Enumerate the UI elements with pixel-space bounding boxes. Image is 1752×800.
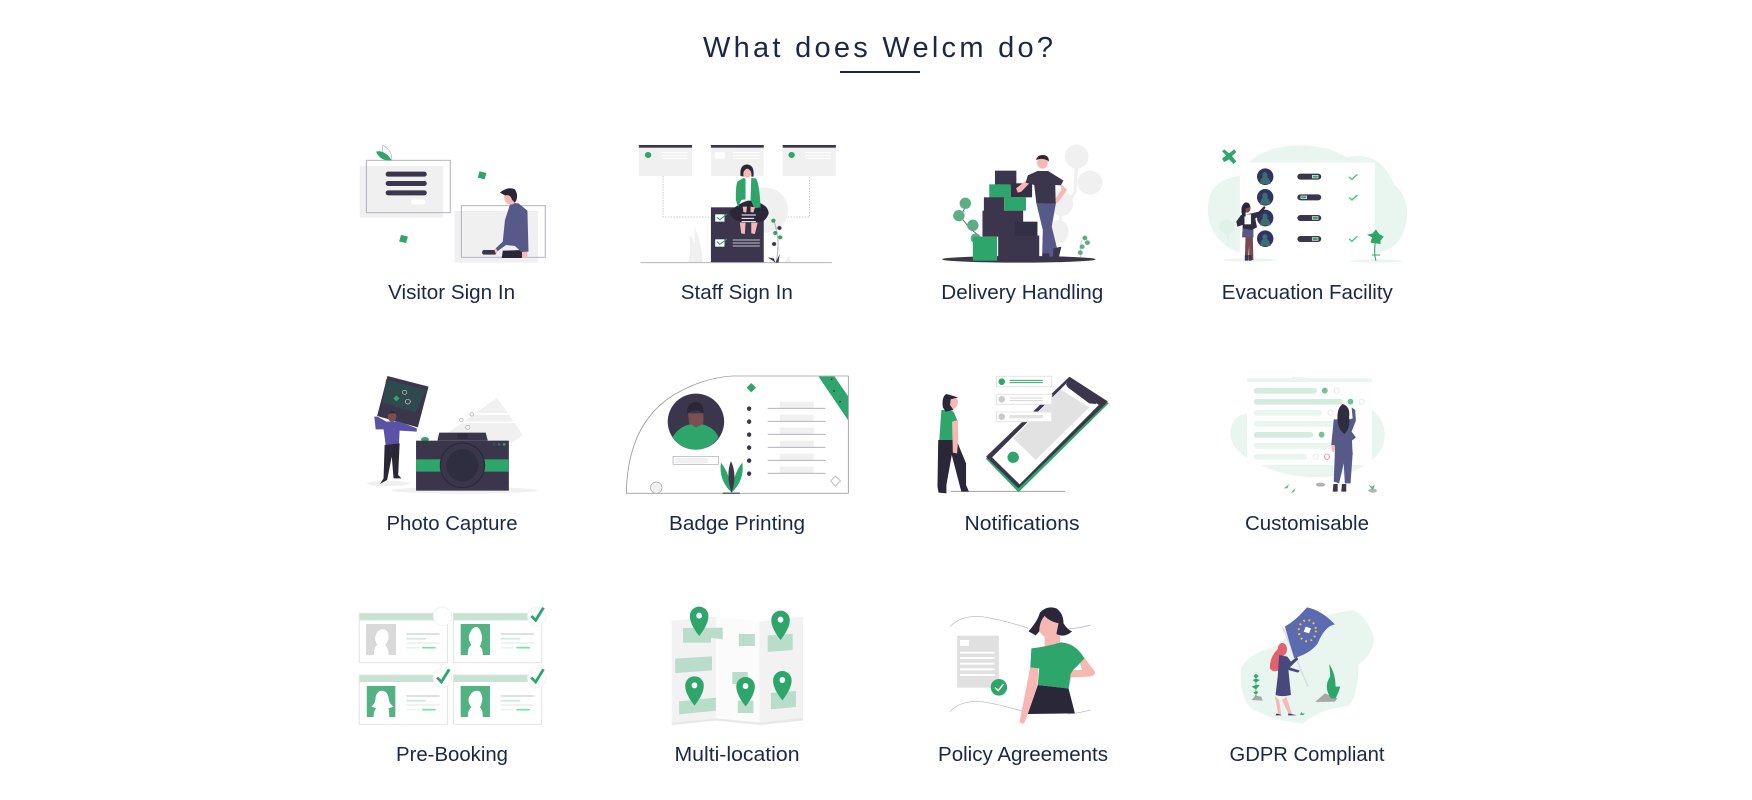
- panel: gdpr compliant: [1230, 607, 1385, 766]
- illustration: woman at settings list: [1230, 377, 1385, 493]
- panel: evacuation facility: [1208, 145, 1407, 304]
- panel: photo capture: [367, 376, 537, 535]
- illustration: folded map with pins: [672, 607, 803, 725]
- panel: multi-location: [672, 607, 803, 766]
- illustration: woman with EU flag: [1241, 607, 1374, 723]
- label: Delivery Handling: [941, 282, 1103, 304]
- label: Customisable: [1245, 513, 1369, 535]
- illustration: woman and phone: [937, 376, 1108, 493]
- label: Visitor Sign In: [388, 282, 515, 304]
- label: Staff Sign In: [681, 282, 793, 304]
- illustration: visitor badge: [626, 376, 848, 494]
- title: What does Welcm do?: [703, 32, 1053, 64]
- panel: policy agreements: [938, 607, 1108, 766]
- illustration: visitor pass cards: [359, 607, 546, 724]
- panel: badge printing: [626, 376, 848, 535]
- label: Badge Printing: [669, 513, 805, 535]
- illustration: man with stacked parcels: [942, 145, 1102, 263]
- label: Photo Capture: [386, 513, 518, 535]
- illustration: roll call checklist: [1208, 145, 1407, 263]
- label: Evacuation Facility: [1222, 282, 1393, 304]
- illustration: woman with policy document: [950, 607, 1095, 724]
- panel: delivery handling: [941, 145, 1103, 304]
- panel: pre-booking: [359, 607, 546, 766]
- illustration: visitor at sign-in screens: [360, 145, 545, 263]
- panel: customisable: [1230, 377, 1385, 535]
- label: Notifications: [964, 513, 1080, 535]
- title underline: [840, 71, 920, 73]
- label: Policy Agreements: [938, 744, 1108, 766]
- label: GDPR Compliant: [1230, 744, 1385, 766]
- panel: notifications: [937, 376, 1108, 535]
- illustration: staff on a checklist box: [639, 145, 836, 263]
- label: Pre-Booking: [396, 744, 508, 766]
- panel: staff sign in: [639, 145, 836, 304]
- illustration: person and camera: [367, 376, 537, 494]
- panel: visitor sign in: [360, 145, 545, 304]
- label: Multi-location: [674, 744, 800, 766]
